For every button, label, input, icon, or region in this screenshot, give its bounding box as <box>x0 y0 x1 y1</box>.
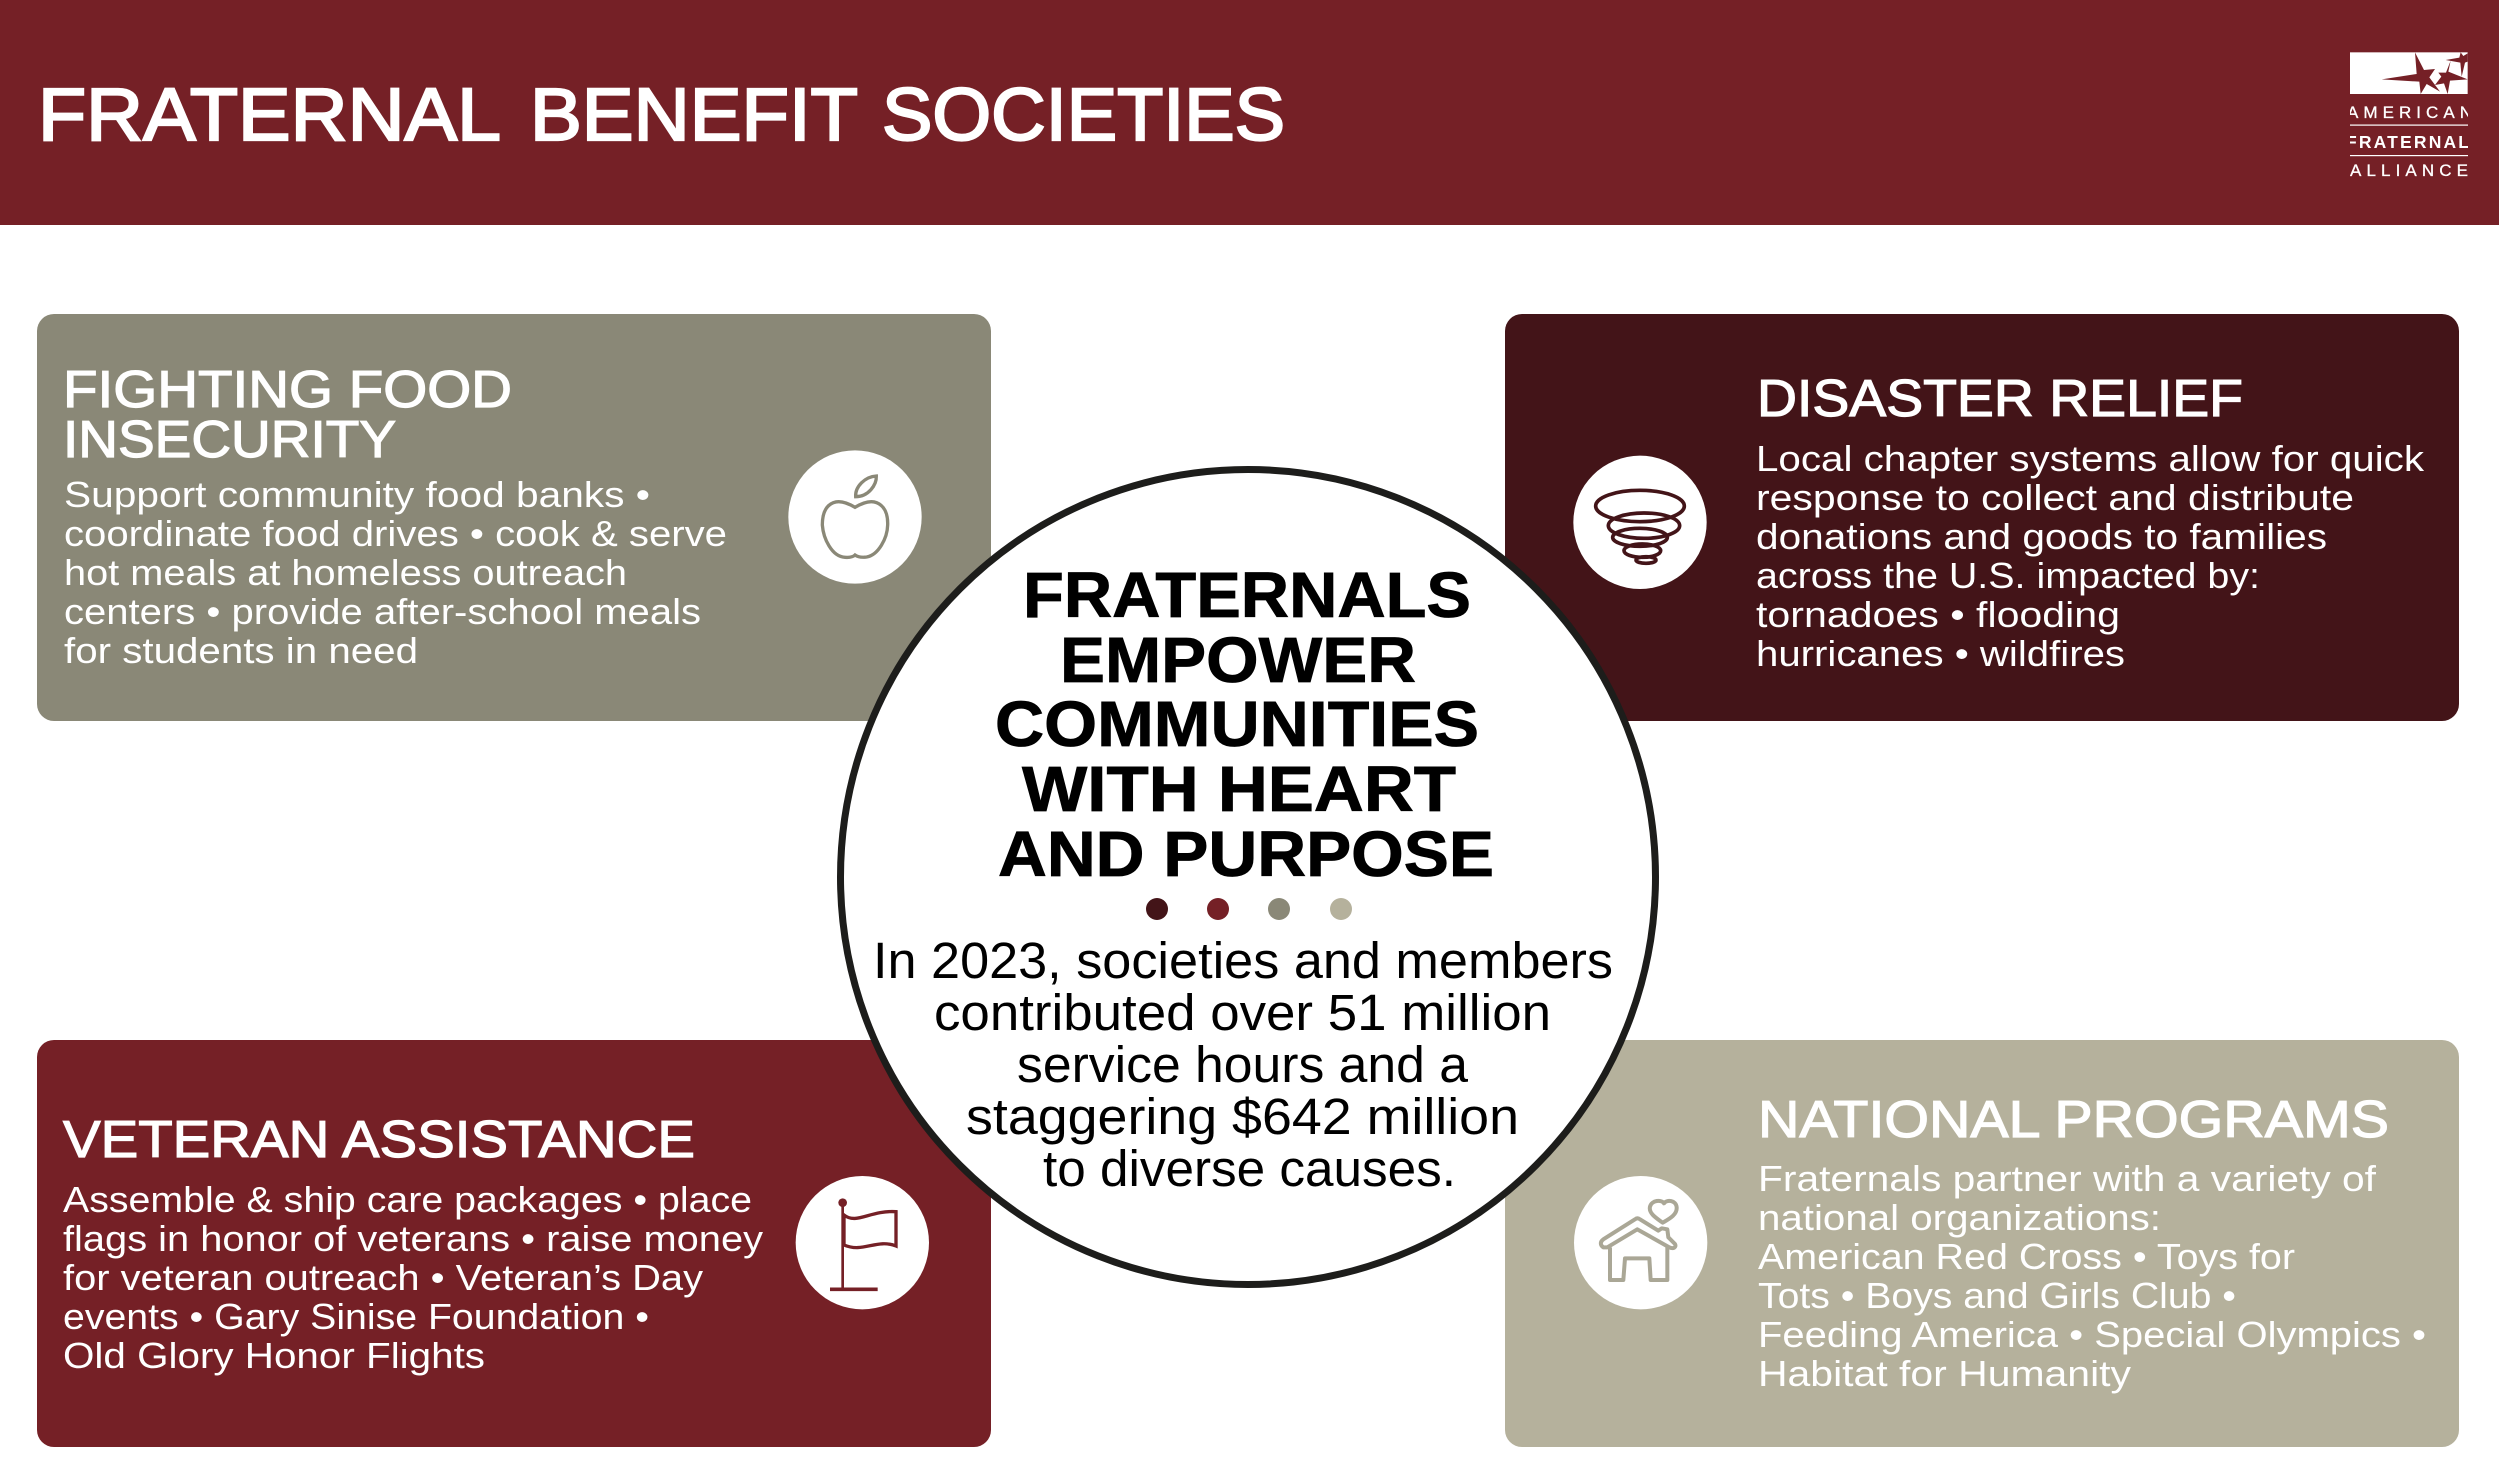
center heading <box>995 559 1494 890</box>
body text: veteran assistance: flags in honor of veterans • raise money <box>63 1218 763 1259</box>
center statistic text: In 2023, societies and members <box>873 932 1613 989</box>
title: BENEFIT <box>530 73 858 156</box>
color dots <box>1146 898 1352 920</box>
body text: food insecurity <box>64 474 727 671</box>
body text: veteran assistance <box>63 1179 763 1376</box>
heading: national programs: NATIONAL PROGRAMS <box>1758 1091 2389 1149</box>
center heading: EMPOWER <box>1060 624 1416 696</box>
center statistic text: staggering $642 million <box>966 1088 1519 1145</box>
body text: disaster relief: hurricanes • wildfires <box>1756 633 2125 674</box>
body text: disaster relief: across the U.S. impacted by: <box>1756 555 2260 596</box>
body text: disaster relief: Local chapter systems allow for quick <box>1756 438 2425 479</box>
panel: disaster relief <box>1505 314 2459 721</box>
logo: American Fraternal Alliance <box>2346 52 2472 180</box>
body text: food insecurity: coordinate food drives • cook & serve <box>64 513 727 554</box>
body text: national programs: Feeding America • Special Olympics • <box>1758 1314 2426 1355</box>
body text: national programs: Habitat for Humanity <box>1758 1353 2131 1394</box>
title: SOCIETIES <box>882 73 1285 156</box>
logo: American Fraternal Alliance: FRATERNAL <box>2346 132 2469 152</box>
heading: veteran assistance: VETERAN ASSISTANCE <box>63 1111 695 1169</box>
body text: disaster relief <box>1756 438 2425 674</box>
center heading: WITH HEART <box>1022 753 1456 825</box>
icon: house with heart <box>1574 1176 1707 1309</box>
center heading: AND PURPOSE <box>998 818 1494 890</box>
body text: veteran assistance: Assemble & ship care packages • place <box>63 1179 752 1220</box>
heading: fighting food insecurity: INSECURITY <box>63 411 396 469</box>
header band <box>0 0 2499 225</box>
body text: disaster relief: donations and goods to families <box>1756 516 2327 557</box>
title: FRATERNAL <box>38 73 501 156</box>
center statistic text <box>873 932 1613 1197</box>
heading: fighting food insecurity: FIGHTING FOOD <box>63 361 512 419</box>
center statistic text: service hours and a <box>1017 1036 1469 1093</box>
panel: fighting food insecurity <box>37 314 991 721</box>
body text: veteran assistance: events • Gary Sinise Foundation • <box>63 1296 649 1337</box>
body text: national programs: Tots • Boys and Girls Club • <box>1758 1275 2236 1316</box>
center heading: FRATERNALS <box>1023 559 1471 631</box>
body text: veteran assistance: Old Glory Honor Flights <box>63 1335 485 1376</box>
icon: apple <box>788 450 922 584</box>
title <box>38 73 1285 156</box>
body text: national programs <box>1758 1158 2426 1394</box>
icon: flag <box>796 1176 929 1309</box>
body text: food insecurity: for students in need <box>64 630 418 671</box>
panel: national programs <box>1505 1040 2459 1447</box>
logo: American Fraternal Alliance: AMERICAN <box>2347 103 2472 122</box>
body text: national programs: national organizations: <box>1758 1197 2161 1238</box>
center statistic text: contributed over 51 million <box>934 984 1551 1041</box>
body text: disaster relief: tornadoes • flooding <box>1756 594 2120 635</box>
body text: veteran assistance: for veteran outreach • Veteran’s Day <box>63 1257 703 1298</box>
icon: tornado <box>1573 456 1707 589</box>
body text: disaster relief: response to collect and distribute <box>1756 477 2354 518</box>
logo: American Fraternal Alliance: ALLIANCE <box>2350 161 2468 180</box>
center circle panel <box>840 470 1656 1284</box>
center statistic text: to diverse causes. <box>1043 1140 1456 1197</box>
panel: veteran assistance <box>37 1040 991 1447</box>
heading: fighting food insecurity <box>63 361 512 469</box>
heading: disaster relief: DISASTER RELIEF <box>1757 370 2243 428</box>
body text: food insecurity: centers • provide after-school meals <box>64 591 701 632</box>
body text: national programs: American Red Cross • Toys for <box>1758 1236 2295 1277</box>
body text: food insecurity: hot meals at homeless outreach <box>64 552 627 593</box>
center heading: COMMUNITIES <box>995 688 1479 760</box>
body text: national programs: Fraternals partner with a variety of <box>1758 1158 2377 1199</box>
body text: food insecurity: Support community food banks • <box>64 474 650 515</box>
